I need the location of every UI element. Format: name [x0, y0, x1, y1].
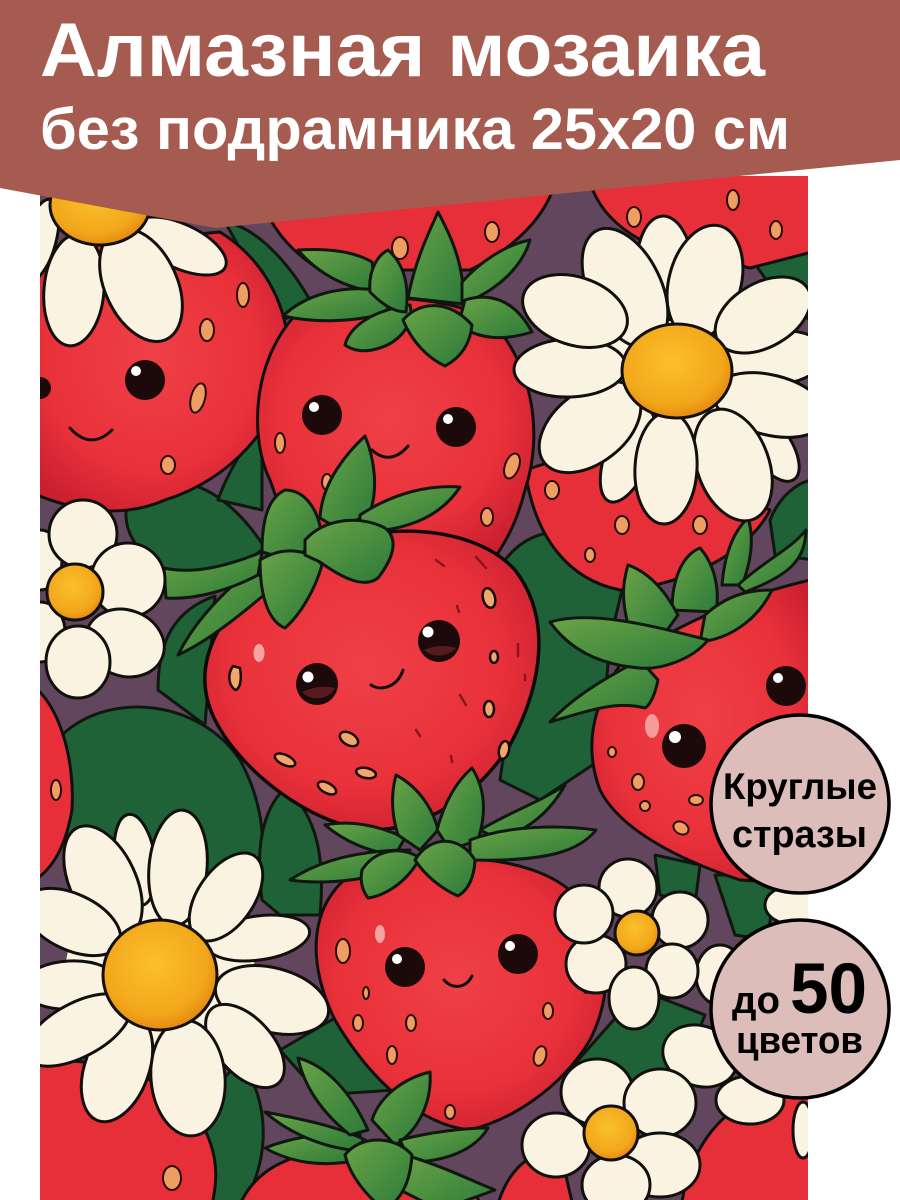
seeds on top strawberries — [51, 190, 782, 1190]
title: Алмазная мозаика — [40, 8, 766, 93]
calyx: main strawberry — [164, 436, 460, 655]
strawberry: main centre — [205, 531, 539, 830]
calyx: center top strawberry — [283, 212, 532, 366]
flower: daisy top left — [40, 197, 228, 348]
calyx: right strawberry — [550, 518, 806, 722]
subtitle: без подрамника 25х20 см — [40, 97, 790, 162]
flower: large daisy bottom left — [40, 808, 330, 1138]
flower: partial right behind badges — [661, 890, 808, 1160]
calyx: bottom centre strawberry — [290, 768, 596, 898]
flower: large daisy right — [513, 215, 834, 532]
badge: round rhinestones: Круглые — [723, 766, 877, 807]
eyes and smile — [254, 620, 460, 705]
badge: round rhinestones — [711, 715, 889, 893]
flower: small left — [40, 498, 166, 700]
strawberry: bottom centre — [316, 858, 606, 1130]
flower: small lower right — [555, 859, 708, 1029]
badge: up to 50 colours — [711, 920, 889, 1098]
header banner — [0, 0, 900, 228]
strawberry: top left — [25, 232, 288, 511]
seeds — [229, 587, 511, 797]
strawberry: center top — [258, 298, 707, 565]
strawberry: right — [592, 578, 820, 885]
back strawberries — [25, 160, 820, 1200]
badge: up to 50 colours: 50 — [790, 950, 867, 1029]
badge: round rhinestones: стразы — [732, 814, 867, 856]
badge: up to 50 colours: до — [732, 980, 780, 1022]
calyx: bottom strawberry — [265, 1058, 495, 1200]
dark green background leaves — [59, 222, 815, 1200]
flower: small bottom — [522, 1059, 700, 1200]
badge: up to 50 colours: цветов — [736, 1020, 863, 1062]
artwork: strawberries and daisies — [13, 160, 834, 1200]
